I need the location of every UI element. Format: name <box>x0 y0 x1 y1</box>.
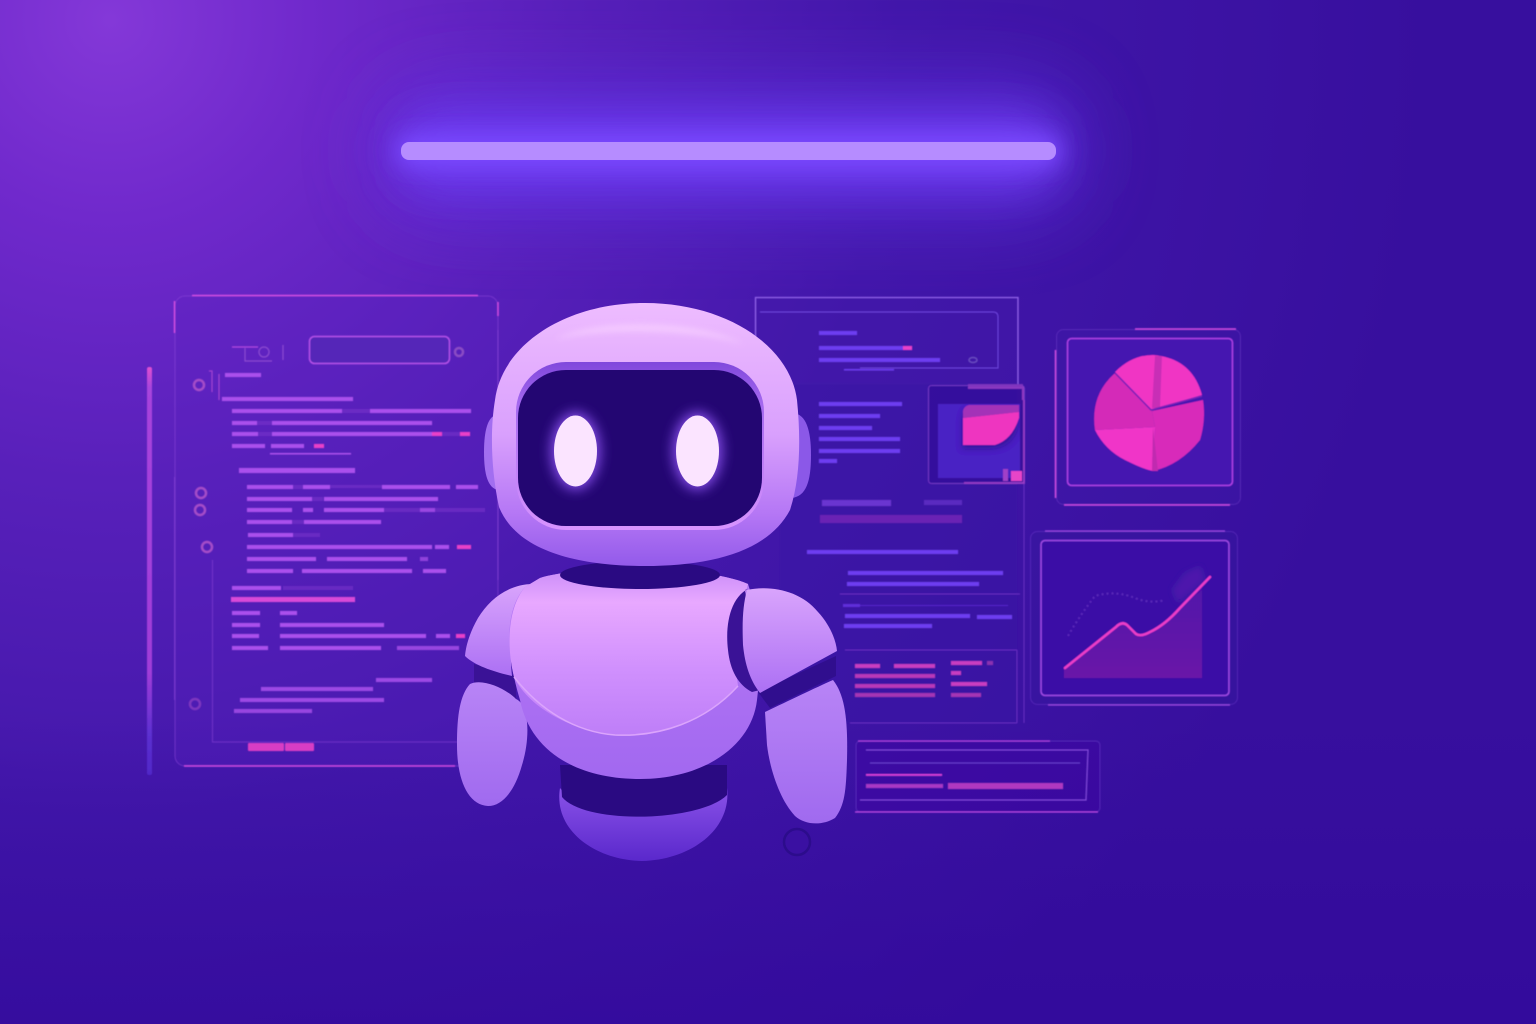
visor rim <box>516 362 764 530</box>
text lines <box>222 373 485 713</box>
panel: document right of robot <box>756 298 1024 723</box>
neck <box>560 561 720 589</box>
search box <box>310 336 450 364</box>
robot waist <box>560 765 727 817</box>
left eye <box>550 412 600 490</box>
trend line <box>1065 577 1210 668</box>
right ear <box>792 413 811 498</box>
chart area <box>1064 583 1202 678</box>
right arm <box>758 656 847 855</box>
pink footer buttons <box>248 743 314 751</box>
robot bottom bowl <box>559 788 727 861</box>
left arm <box>457 664 527 806</box>
image thumbnail <box>928 384 1024 484</box>
text lines blue <box>807 331 1012 628</box>
panel: pie chart <box>1056 329 1240 505</box>
left ear <box>484 415 498 490</box>
neon title bar <box>380 85 1080 215</box>
panel: bottom strip <box>855 741 1100 812</box>
helmet <box>492 303 799 566</box>
visor <box>518 370 762 526</box>
left side scrollbar <box>147 367 152 775</box>
torso <box>509 569 760 779</box>
status dots <box>190 348 463 709</box>
panel: code document left <box>147 296 498 775</box>
pie <box>1094 355 1204 471</box>
left shoulder <box>465 584 533 676</box>
pink table lines <box>855 661 993 697</box>
right eye <box>672 412 722 490</box>
right shoulder <box>727 587 837 693</box>
header icon <box>232 345 283 361</box>
helmet highlight <box>555 324 745 345</box>
panel: line chart <box>1030 531 1238 705</box>
robot <box>457 303 847 861</box>
